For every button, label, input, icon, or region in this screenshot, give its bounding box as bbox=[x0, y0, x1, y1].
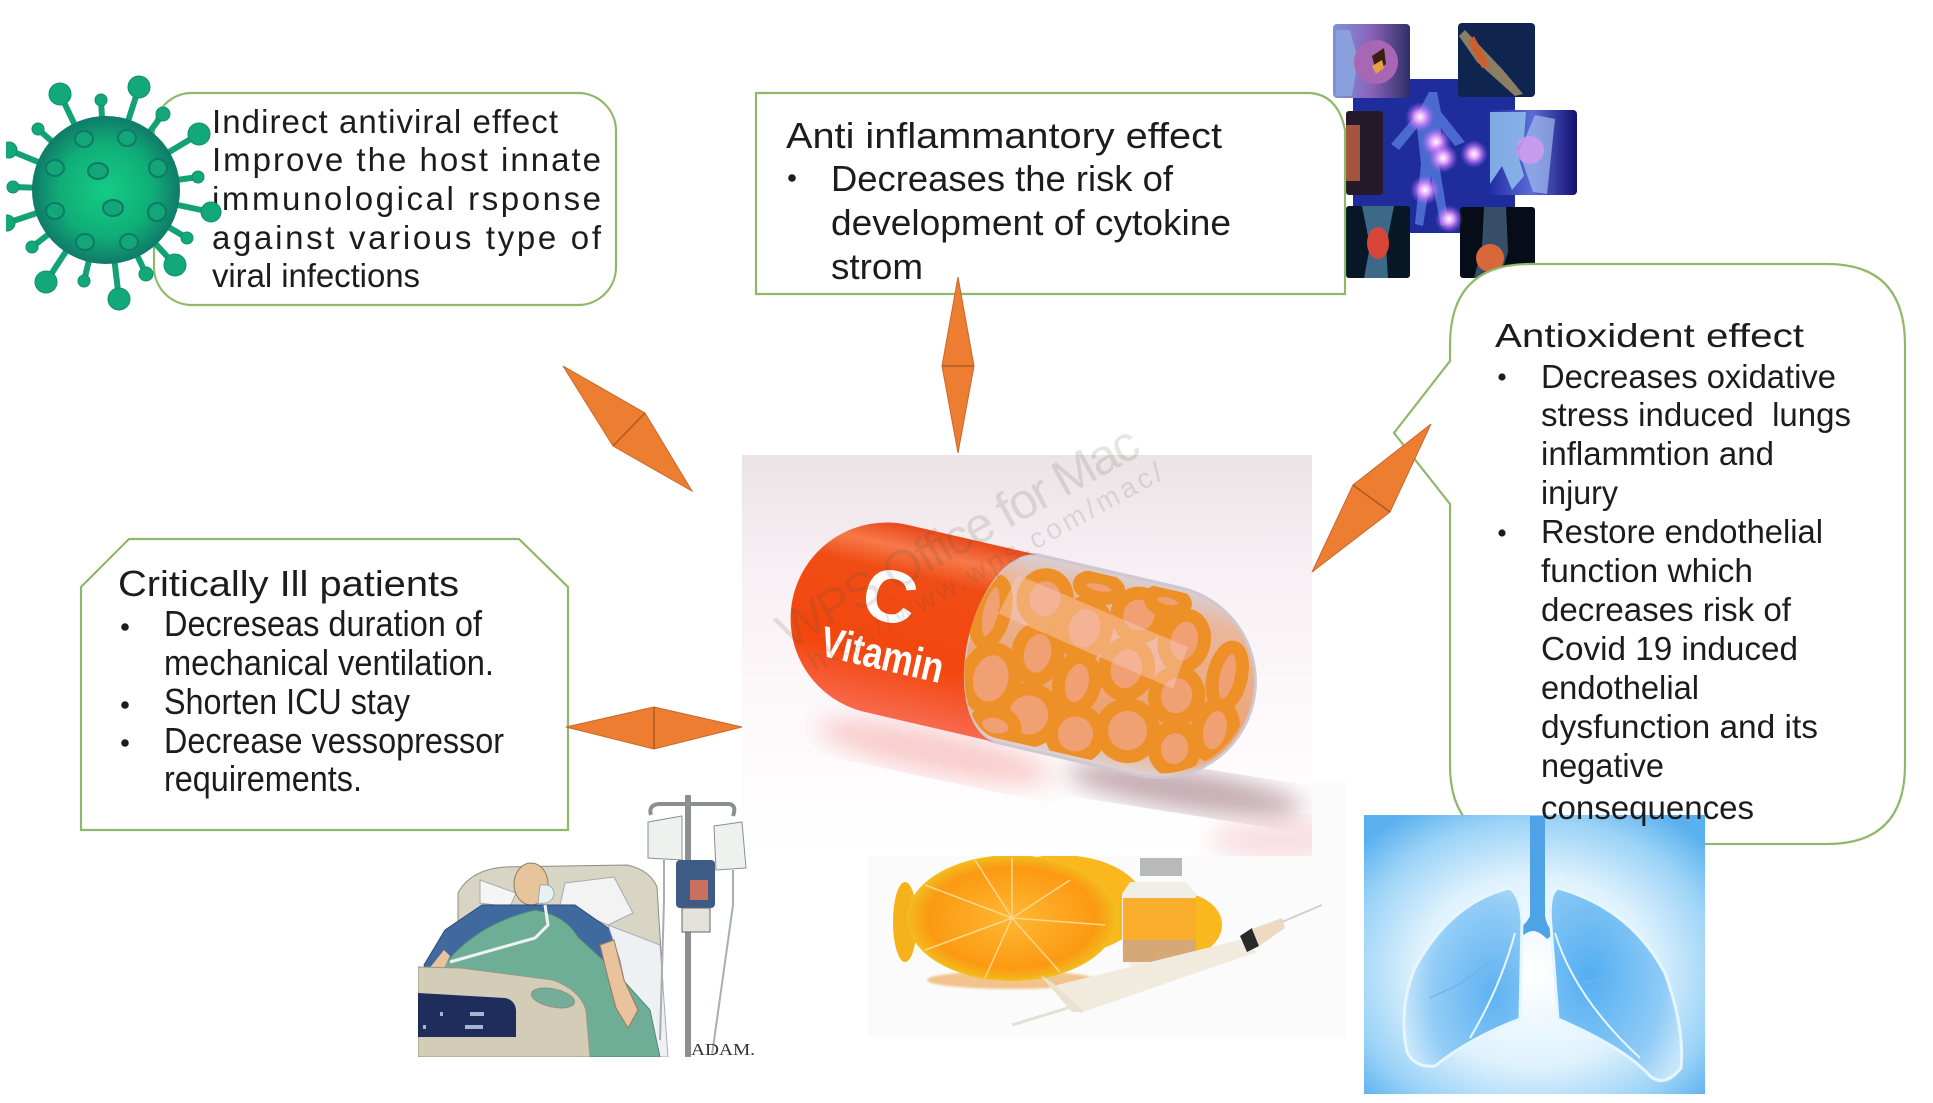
antiviral text block: against various type of bbox=[212, 219, 602, 256]
anti inflammatory text block: strom bbox=[831, 246, 923, 287]
antioxidant text block: function which bbox=[1541, 552, 1753, 589]
watermark: WPS Office for Mac bbox=[767, 414, 1149, 660]
antioxidant text block: stress induced lungs bbox=[1541, 396, 1851, 433]
orange capsule cap bbox=[790, 522, 1038, 742]
critically ill text block: Shorten ICU stay bbox=[164, 681, 410, 722]
icon: green coronavirus bbox=[0, 76, 221, 310]
antiviral text block: Indirect antiviral effect bbox=[212, 103, 558, 140]
clear capsule half bbox=[964, 552, 1257, 779]
antiviral text block: immunological rsponse bbox=[212, 180, 601, 217]
image: ICU patient in bed with IV pole bbox=[418, 795, 755, 1059]
arrow: critically ill to capsule bbox=[566, 707, 742, 749]
antioxidant text block: dysfunction and its bbox=[1541, 708, 1818, 745]
antioxidant text block: Covid 19 induced bbox=[1541, 630, 1798, 667]
critically ill text block: Decrease vessopressor bbox=[164, 720, 504, 761]
anti inflammatory text block: development of cytokine bbox=[831, 202, 1231, 243]
anti inflammatory text block: Anti inflammantory effect bbox=[786, 115, 1222, 156]
image: vitamin C capsule bbox=[742, 455, 1350, 862]
panel: anti inflammatory effect bbox=[756, 93, 1345, 294]
image: lungs bbox=[1364, 815, 1705, 1094]
watermark: http://www.wps.com/mac/ bbox=[803, 456, 1168, 677]
capsule highlight band bbox=[998, 575, 1188, 688]
antioxidant text block: Antioxident effect bbox=[1495, 317, 1804, 354]
antiviral text block: viral infections bbox=[212, 257, 420, 294]
anti inflammatory text block bbox=[786, 115, 1231, 287]
critically ill text block: mechanical ventilation. bbox=[164, 642, 494, 683]
image: orange slices vial and syringe bbox=[868, 780, 1346, 1037]
antioxidant text block: Decreases oxidative bbox=[1541, 358, 1836, 395]
panel: antioxidant effect callout bbox=[1394, 264, 1905, 844]
orange vitamin rings bbox=[964, 568, 1249, 774]
antioxidant text block bbox=[1495, 317, 1851, 826]
antioxidant text block: endothelial bbox=[1541, 669, 1699, 706]
image: joint pain body collage bbox=[1333, 23, 1577, 278]
capsule word Vitamin: Vitamin bbox=[816, 618, 948, 693]
capsule letter C: C bbox=[855, 550, 925, 643]
arrow: antioxidant to capsule bbox=[1312, 424, 1431, 572]
critically ill text block bbox=[118, 563, 504, 799]
antioxidant text block: inflammtion and bbox=[1541, 435, 1774, 472]
critically ill text block: requirements. bbox=[164, 758, 362, 799]
panel: critically ill patients bbox=[81, 539, 568, 830]
antiviral text block bbox=[212, 103, 602, 294]
arrow: anti inflammatory to capsule bbox=[942, 277, 974, 453]
panel: indirect antiviral effect bbox=[154, 93, 616, 305]
antioxidant text block: consequences bbox=[1541, 789, 1754, 826]
critically ill text block: Decreseas duration of bbox=[164, 603, 483, 644]
antioxidant text block: Restore endothelial bbox=[1541, 513, 1823, 550]
anti inflammatory text block: Decreases the risk of bbox=[831, 158, 1174, 199]
image: ICU patient in bed with IV pole: ADAM. bbox=[691, 1040, 755, 1059]
critically ill text block: Critically Ill patients bbox=[118, 563, 459, 604]
arrow: antiviral to capsule bbox=[563, 366, 692, 491]
antioxidant text block: injury bbox=[1541, 474, 1618, 511]
antioxidant text block: decreases risk of bbox=[1541, 591, 1792, 628]
antiviral text block: Improve the host innate bbox=[212, 141, 601, 178]
antioxidant text block: negative bbox=[1541, 747, 1664, 784]
